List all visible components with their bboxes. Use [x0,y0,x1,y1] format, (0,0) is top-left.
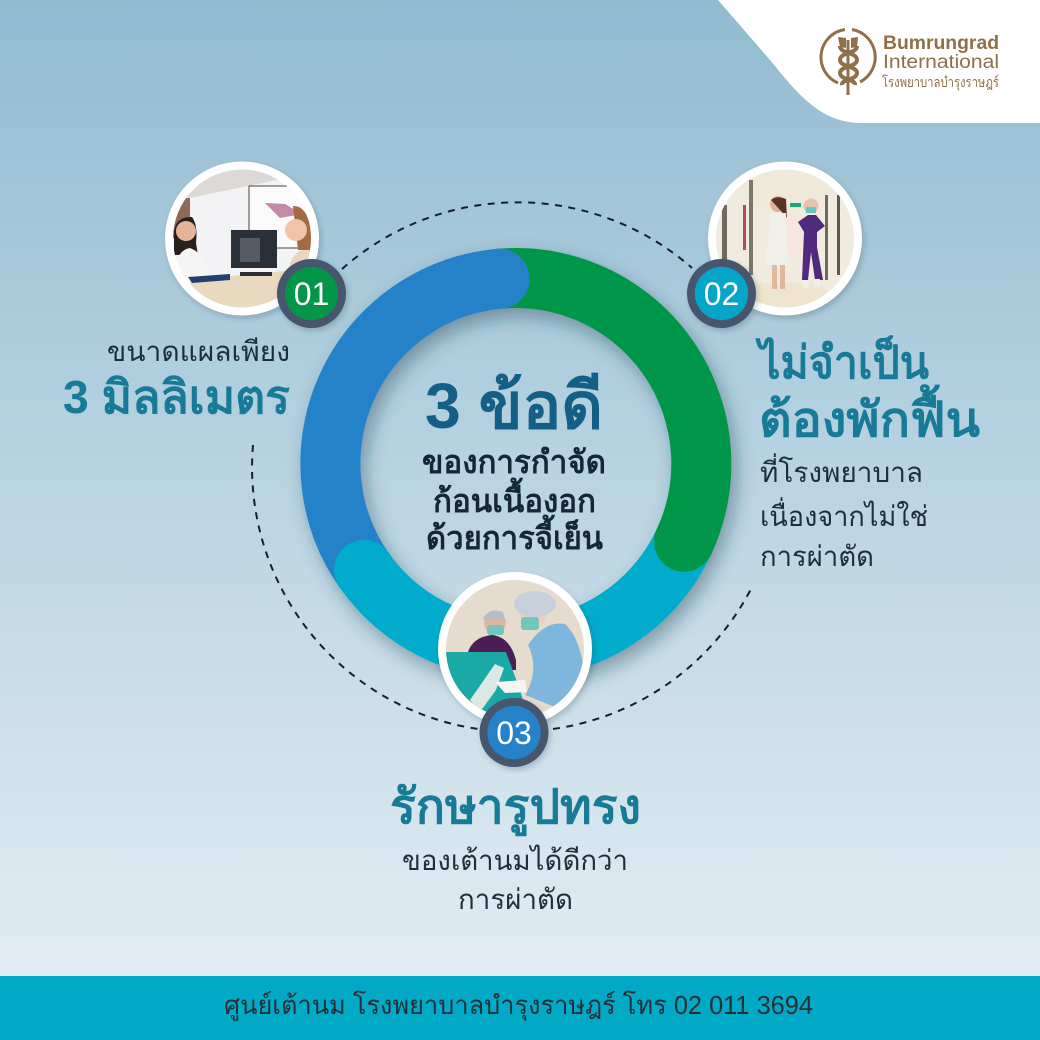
center title: 3 ข้อดี [425,370,603,442]
label 03: ของเต้านมได้ดีกว่า [402,845,628,876]
badge 02: 02 [704,276,739,312]
label 03: การผ่าตัด [458,884,573,915]
logo: Bumrungrad International [821,30,999,95]
label 02: ต้องพักฟื้น [759,384,980,447]
label 02: ที่โรงพยาบาล [760,453,923,488]
footer bar: ศูนย์เต้านม โรงพยาบาลบำรุงราษฎร์ โทร 02 011 3694 [224,990,813,1021]
ring segment: blue cap [470,249,530,309]
ring segment: teal [364,542,684,649]
label 03 [390,781,641,915]
label 01: 3 มิลลิเมตร [63,371,290,423]
label 01: ขนาดแผลเพียง [107,336,290,367]
footer bar [0,976,1040,1040]
ring segment: blue [330,279,500,570]
badge 03: 03 [496,715,532,751]
photo 1: doctor and patient at monitor [165,162,319,316]
logo: Bumrungrad International: International [883,52,999,73]
ring segment: green [500,278,701,542]
label 02: เนื่องจากไม่ใช่ [760,497,928,532]
photo 3: medical staff performing procedure [438,572,592,726]
label 02: การผ่าตัด [760,541,874,572]
label 01 [63,336,290,423]
center title: ด้วยการจี้เย็น [426,514,603,556]
donut ring chart [330,249,701,649]
dashed connecting circle [252,202,753,729]
photo 2: patient and nurse in corridor [708,162,862,316]
label 02 [755,335,980,572]
label 03: รักษารูปทรง [390,781,641,837]
logo: Bumrungrad International: Bumrungrad [883,33,999,54]
badge 01 [277,259,346,328]
white logo corner panel [718,0,1040,123]
logo: Bumrungrad International: โรงพยาบาลบำรุงราษฎร์ [882,74,999,91]
center title: ของการกำจัด [422,444,606,480]
badge 02 [687,259,756,328]
badge 03 [480,698,548,767]
center title: ก้อนเนื้องอก [433,477,596,519]
badge 01: 01 [294,276,329,312]
label 02: ไม่จำเป็น [755,335,929,388]
center title [422,370,606,556]
